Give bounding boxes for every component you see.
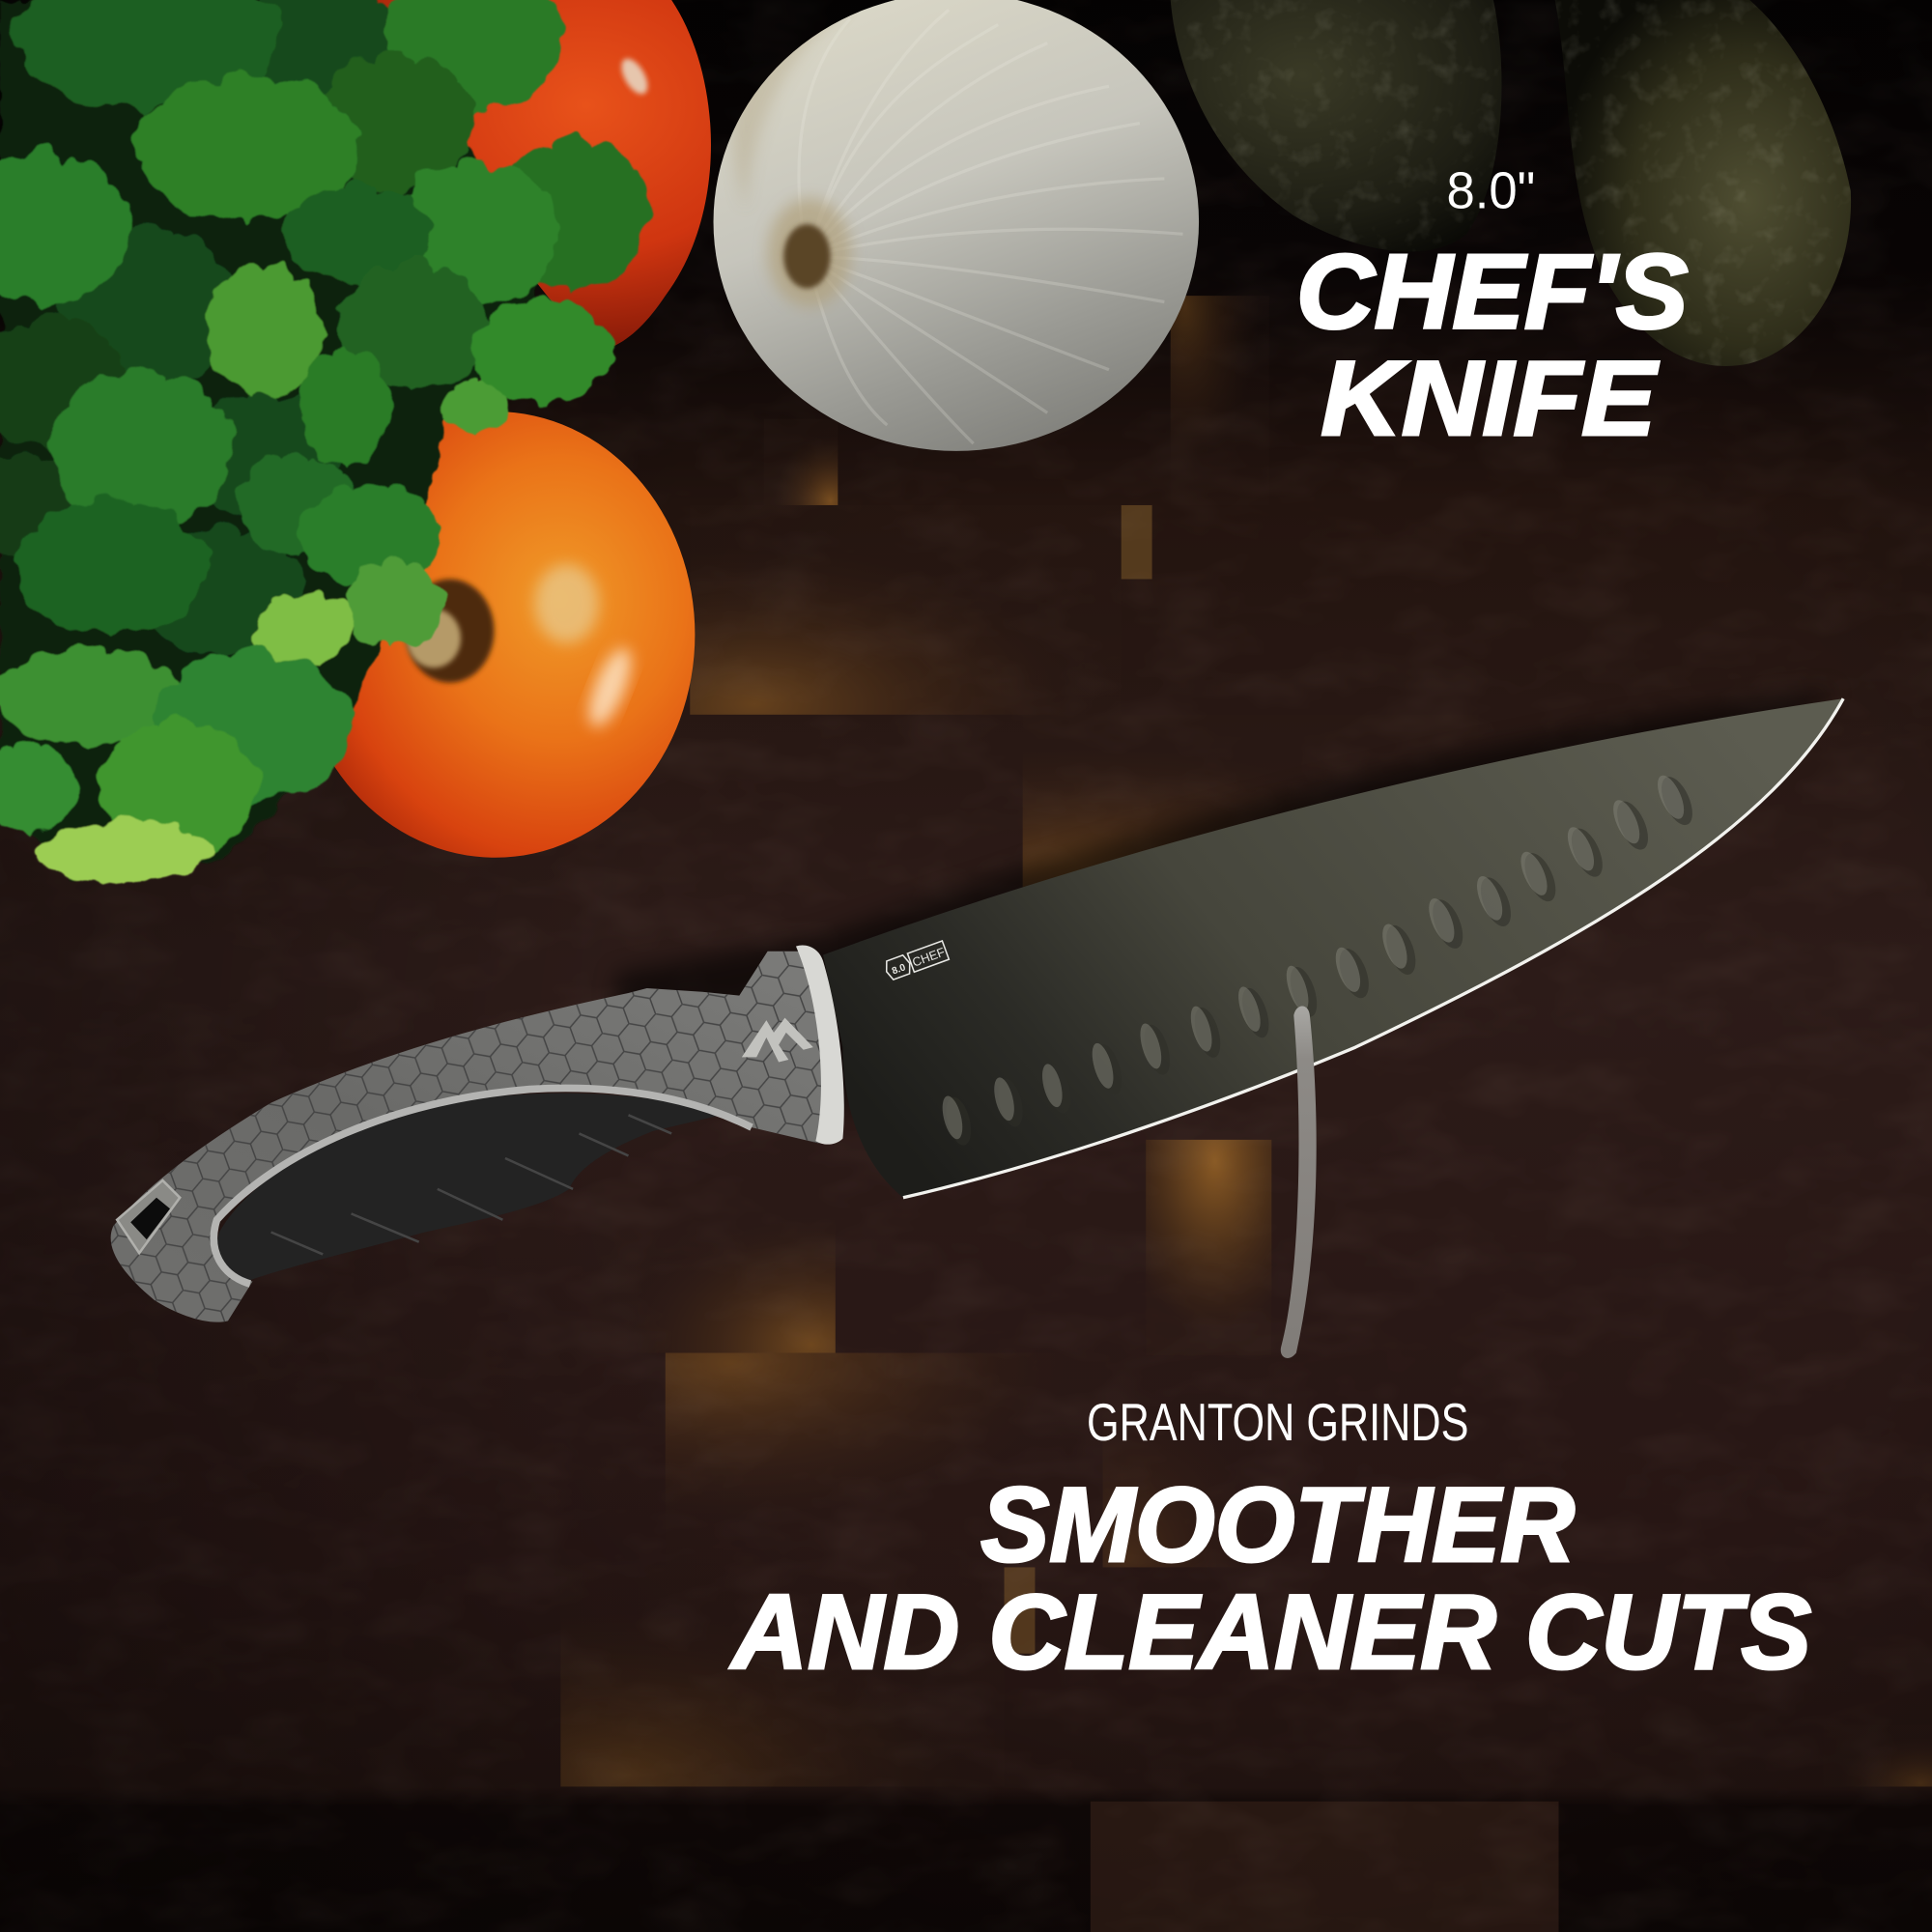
blade: [823, 698, 1843, 1198]
tomato top: [265, 0, 711, 352]
avocado left: [1171, 0, 1501, 251]
blade logo: CHEF: [910, 945, 947, 970]
onion: [714, 0, 1199, 451]
cilantro bunch: [0, 0, 649, 885]
grip ridges: [271, 1115, 671, 1254]
black grip: [216, 1094, 721, 1288]
heading: smoother and cleaner cuts: SMOOTHER: [980, 1466, 1575, 1584]
blade logo: 8.0: [891, 962, 907, 977]
knife shadow: [616, 690, 1836, 1109]
tomato bottom: [296, 412, 695, 858]
heading: chef's knife: KNIFE: [1321, 340, 1659, 458]
mountain logo: [742, 1018, 813, 1062]
chef's knife: [74, 690, 1843, 1343]
heading: chef's knife: CHEF'S: [1296, 233, 1688, 351]
heading: smoother and cleaner cuts: [729, 1466, 1811, 1691]
blade logo: [883, 941, 949, 980]
callout line: granton grinds: [1281, 1006, 1317, 1358]
heading: smoother and cleaner cuts: AND CLEANER CUTS: [729, 1574, 1811, 1691]
text: granton grinds: GRANTON GRINDS: [1087, 1392, 1468, 1452]
grey handle: [110, 951, 821, 1322]
white guard: [796, 945, 844, 1145]
avocado right: [1547, 0, 1861, 382]
heading: chef's knife: [1296, 233, 1688, 458]
text: size label: 8.0": [1446, 163, 1535, 220]
